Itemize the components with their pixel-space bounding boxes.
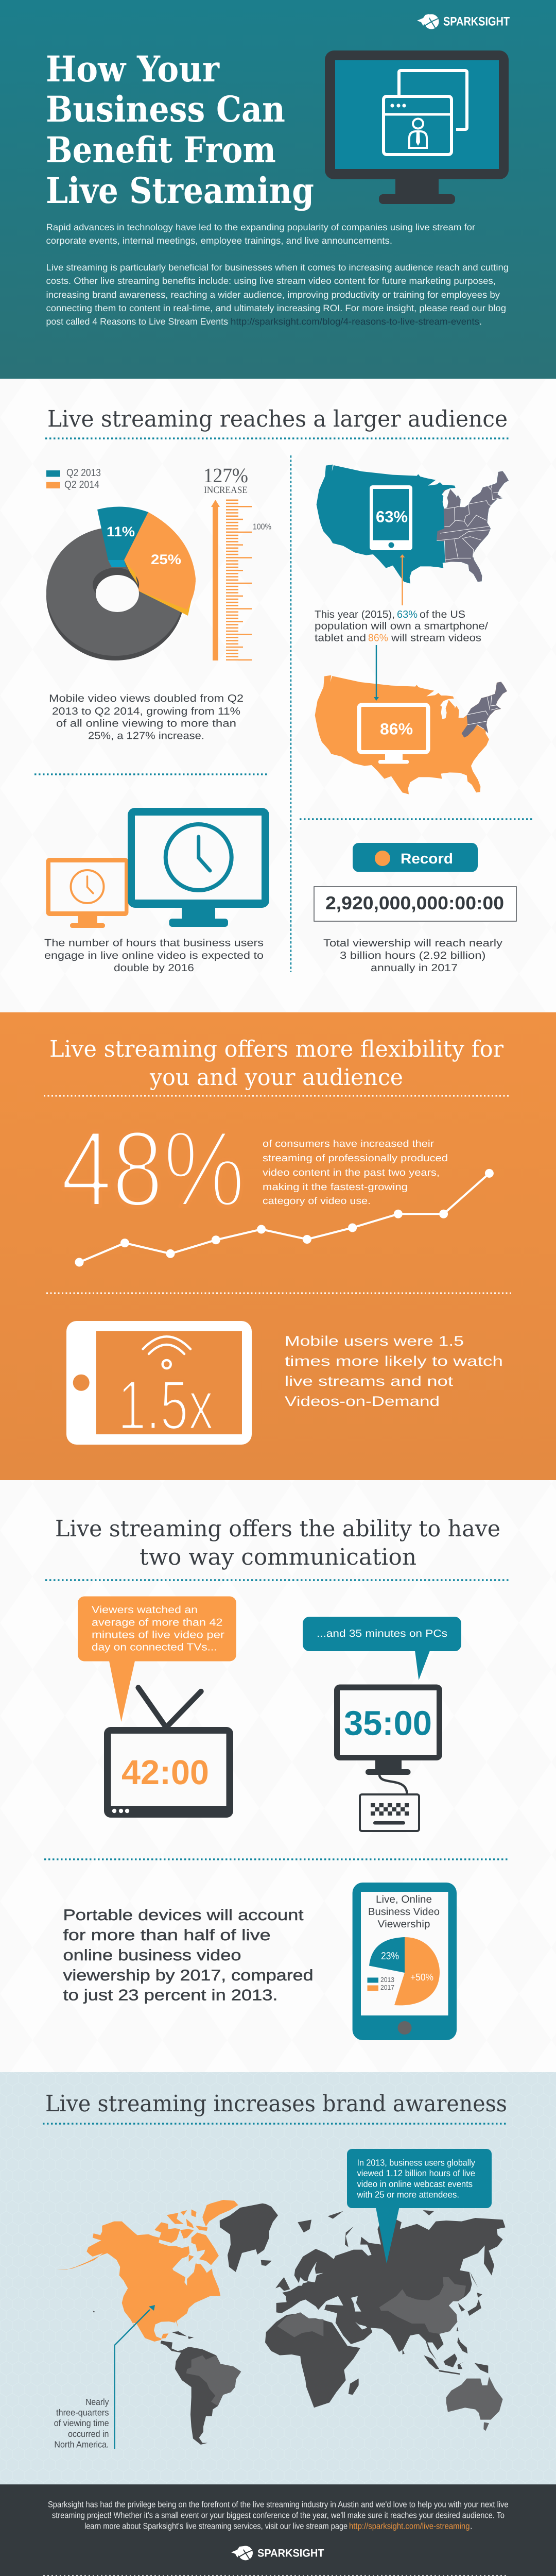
text: portable devices: to just 23 percent in 2013. <box>63 1987 278 2004</box>
heading: flexibility: you and your audience <box>149 1064 403 1091</box>
text: US population: 86% <box>368 633 388 644</box>
logo: Sparksight <box>417 14 510 29</box>
intro text: Rapid advances in technology have led to the expanding popularity of companies using live stream for <box>46 222 475 232</box>
heading: larger audience: Live streaming reaches a larger audience <box>47 406 508 432</box>
map: Americas <box>57 2200 241 2445</box>
counter box: 2,920,000,000:00:00 <box>325 892 504 913</box>
arrow: orange up <box>399 554 405 605</box>
logo: Sparksight: SPARKSIGHT <box>443 14 510 29</box>
text: about Sparksight: Sparksight has had the privilege being on the forefront of the live streaming industry in Austin and we'd love to help you with your next live <box>48 2500 509 2510</box>
callout: connected TVs: Viewers watched an <box>92 1604 198 1616</box>
logo: Sparksight footer: SPARKSIGHT <box>257 2548 324 2560</box>
title: Live Streaming <box>46 170 314 212</box>
text: North America viewing time: Nearly <box>85 2397 109 2407</box>
text: hours expected to double: engage in live online video is expected to <box>44 950 264 961</box>
callout: 1.12 billion hours: with 25 or more attendees. <box>357 2190 459 2200</box>
text: mobile users: times more likely to watch <box>285 1353 503 1369</box>
chart: 3D donut: 25% <box>151 552 181 567</box>
callout: connected TVs: day on connected TVs... <box>92 1641 217 1653</box>
map: US 63 percent: 63% <box>376 508 408 526</box>
text: about Sparksight: . <box>470 2522 473 2531</box>
text: US population: population will own a smartphone/ <box>315 620 488 632</box>
icon: phone with pie chart: Business Video <box>368 1906 440 1918</box>
text: hours expected to double <box>44 938 264 974</box>
text: about Sparksight: learn more about Sparksight's live streaming services, visit our live stream page <box>84 2522 348 2531</box>
text: mobile users: Mobile users were 1.5 <box>285 1333 464 1349</box>
text: North America viewing time: three-quarters <box>56 2407 109 2417</box>
callout: PCs <box>303 1617 461 1680</box>
text: US population: tablet and <box>315 633 366 644</box>
intro text: Live streaming is particularly beneficial for businesses when it comes to increasing audience reach and cutting <box>46 262 509 273</box>
chart: rising line <box>75 1169 494 1266</box>
icon: large teal monitor clock <box>128 808 269 927</box>
arrow: teal down <box>374 645 379 701</box>
heading: flexibility <box>49 1036 504 1091</box>
text: US population: will stream videos <box>391 633 481 644</box>
stat: 48 percent: 48% <box>61 1108 245 1229</box>
intro text: corporate events, internal meetings, employee trainings, and live announcements. <box>46 235 392 246</box>
text: consumers <box>263 1139 448 1207</box>
icon: phone with pie chart <box>353 1883 457 2040</box>
icon: phone with pie chart: 23% <box>381 1951 399 1962</box>
map: US 86 percent: 86% <box>380 720 413 738</box>
text: US population <box>315 609 488 644</box>
title: Business Can <box>46 89 285 130</box>
icon: monitor with video windows <box>325 50 509 204</box>
icon: tablet with wifi <box>66 1321 252 1445</box>
logo: Sparksight footer <box>231 2546 324 2561</box>
text: total viewership: annually in 2017 <box>371 962 458 974</box>
intro text <box>46 222 509 327</box>
text: total viewership <box>323 938 502 974</box>
callout: 1.12 billion hours <box>347 2149 492 2264</box>
heading: flexibility: Live streaming offers more flexibility for <box>49 1036 504 1062</box>
chart: 3D donut <box>46 507 196 660</box>
map: US 63 percent <box>317 465 509 584</box>
callout: 1.12 billion hours: In 2013, business users globally <box>357 2158 475 2168</box>
callout: 1.12 billion hours: video in online webcast events <box>357 2179 473 2189</box>
panel: footer <box>0 2484 556 2576</box>
panel: two way communication <box>0 1480 556 2072</box>
intro text: connecting them to content in real-time, and ultimately increasing ROI. For more insight, please read our blog <box>46 303 506 313</box>
map: Greenland and Iceland <box>220 2204 278 2272</box>
text: consumers: category of video use. <box>263 1196 371 1207</box>
text: mobile video views <box>49 693 244 742</box>
text: North America viewing time: North America. <box>54 2439 109 2449</box>
text: consumers: video content in the past two years, <box>263 1167 440 1178</box>
title <box>46 48 314 212</box>
panel: larger audience <box>0 379 556 1012</box>
heading: communication: Live streaming offers the ability to have <box>55 1516 500 1542</box>
button: record <box>353 843 478 872</box>
text: hours expected to double: double by 2016 <box>114 962 194 974</box>
text: US population: 63% <box>397 609 418 620</box>
intro text: . <box>479 316 482 327</box>
text: US population: of the US <box>420 609 465 620</box>
text: mobile video views: 25%, a 127% increase. <box>88 731 204 742</box>
text: North America viewing time: of viewing time <box>54 2418 109 2428</box>
text: consumers: making it the fastest-growing <box>263 1182 408 1193</box>
text: mobile video views: Mobile video views doubled from Q2 <box>49 693 244 704</box>
chart: 127% increase scale: 127% <box>203 464 248 487</box>
callout: PCs: ...and 35 minutes on PCs <box>317 1628 447 1639</box>
icon: phone with pie chart: 2017 <box>380 1984 394 1991</box>
text: about Sparksight <box>48 2500 509 2531</box>
title: How Your <box>46 48 220 90</box>
icon: phone with pie chart: 2013 <box>380 1976 394 1984</box>
icon: tablet with wifi: 1.5x <box>118 1366 214 1444</box>
intro text: http://sparksight.com/blog/4-reasons-to-live-stream-events <box>231 316 479 327</box>
text: portable devices: viewership by 2017, compared <box>63 1967 313 1984</box>
icon: PC 35:00: 35:00 <box>344 1704 432 1742</box>
icon: small orange monitor clock <box>46 858 129 928</box>
text: mobile video views: 2013 to Q2 2014, growing from 11% <box>52 706 240 717</box>
chart: 3D donut: 11% <box>107 524 135 539</box>
callout: connected TVs: average of more than 42 <box>92 1617 222 1628</box>
intro text: costs. Other live streaming benefits include: using live stream video content for future marketing purposes, <box>46 276 496 286</box>
chart: 127% increase scale <box>203 464 271 661</box>
legend: Q2 2014 <box>64 479 99 490</box>
text: total viewership: 3 billion hours (2.92 billion) <box>340 950 486 961</box>
callout: 1.12 billion hours: viewed 1.12 billion hours of live <box>357 2168 475 2178</box>
panel: flexibility <box>0 1012 556 1480</box>
text: portable devices: online business video <box>63 1947 241 1964</box>
text: consumers: streaming of professionally produced <box>263 1153 448 1164</box>
heading: communication <box>55 1516 500 1570</box>
callout: connected TVs <box>78 1596 236 1722</box>
legend: Q2 2013 <box>66 467 101 479</box>
icon: TV 42:00 <box>104 1688 233 1818</box>
text: mobile users: live streams and not <box>285 1374 454 1389</box>
arrow: to North America <box>115 2305 155 2449</box>
callout: connected TVs: minutes of live video per <box>92 1629 224 1640</box>
heading: brand awareness: Live streaming increases brand awareness <box>45 2091 507 2117</box>
text: about Sparksight: http://sparksight.com/live-streaming <box>349 2522 470 2531</box>
panel: header <box>0 0 556 379</box>
text: US population: This year (2015), <box>315 609 395 620</box>
map: US 86 percent <box>315 675 507 794</box>
text: North America viewing time <box>54 2397 109 2449</box>
icon: PC 35:00 <box>334 1685 442 1831</box>
text: total viewership: Total viewership will reach nearly <box>323 938 502 949</box>
legend <box>46 467 101 490</box>
text: North America viewing time: occurred in <box>68 2429 109 2439</box>
text: portable devices: for more than half of live <box>63 1927 271 1944</box>
text: portable devices: Portable devices will account <box>63 1907 304 1924</box>
icon: phone with pie chart: Viewership <box>378 1919 430 1930</box>
intro text: post called 4 Reasons to Live Stream Events <box>46 316 228 327</box>
chart: 127% increase scale: INCREASE <box>204 485 248 496</box>
counter box <box>314 887 516 921</box>
heading: communication: two way communication <box>140 1544 416 1570</box>
intro text: increasing brand awareness, reaching a wider audience, improving productivity or training for employees by <box>46 290 500 300</box>
button: record: Record <box>401 851 453 867</box>
text: portable devices <box>63 1907 313 2004</box>
map: Eurasia, Africa, Australia <box>265 2210 506 2431</box>
icon: phone with pie chart: Live, Online <box>376 1894 432 1905</box>
text: consumers: of consumers have increased their <box>263 1139 435 1149</box>
text: hours expected to double: The number of hours that business users <box>44 938 264 949</box>
icon: TV 42:00: 42:00 <box>121 1753 209 1792</box>
text: mobile video views: of all online viewing to more than <box>56 718 236 730</box>
title: Benefit From <box>46 129 276 171</box>
text: about Sparksight: streaming project! Whether it's a small event or your biggest conference of the year, we'll make sure it reaches your desired audience. To <box>52 2511 505 2520</box>
icon: phone with pie chart: +50% <box>410 1972 433 1983</box>
panel: brand awareness <box>0 2072 556 2484</box>
text: mobile users <box>285 1333 503 1409</box>
text: mobile users: Videos-on-Demand <box>285 1394 440 1409</box>
chart: 127% increase scale: 100% <box>253 522 271 532</box>
